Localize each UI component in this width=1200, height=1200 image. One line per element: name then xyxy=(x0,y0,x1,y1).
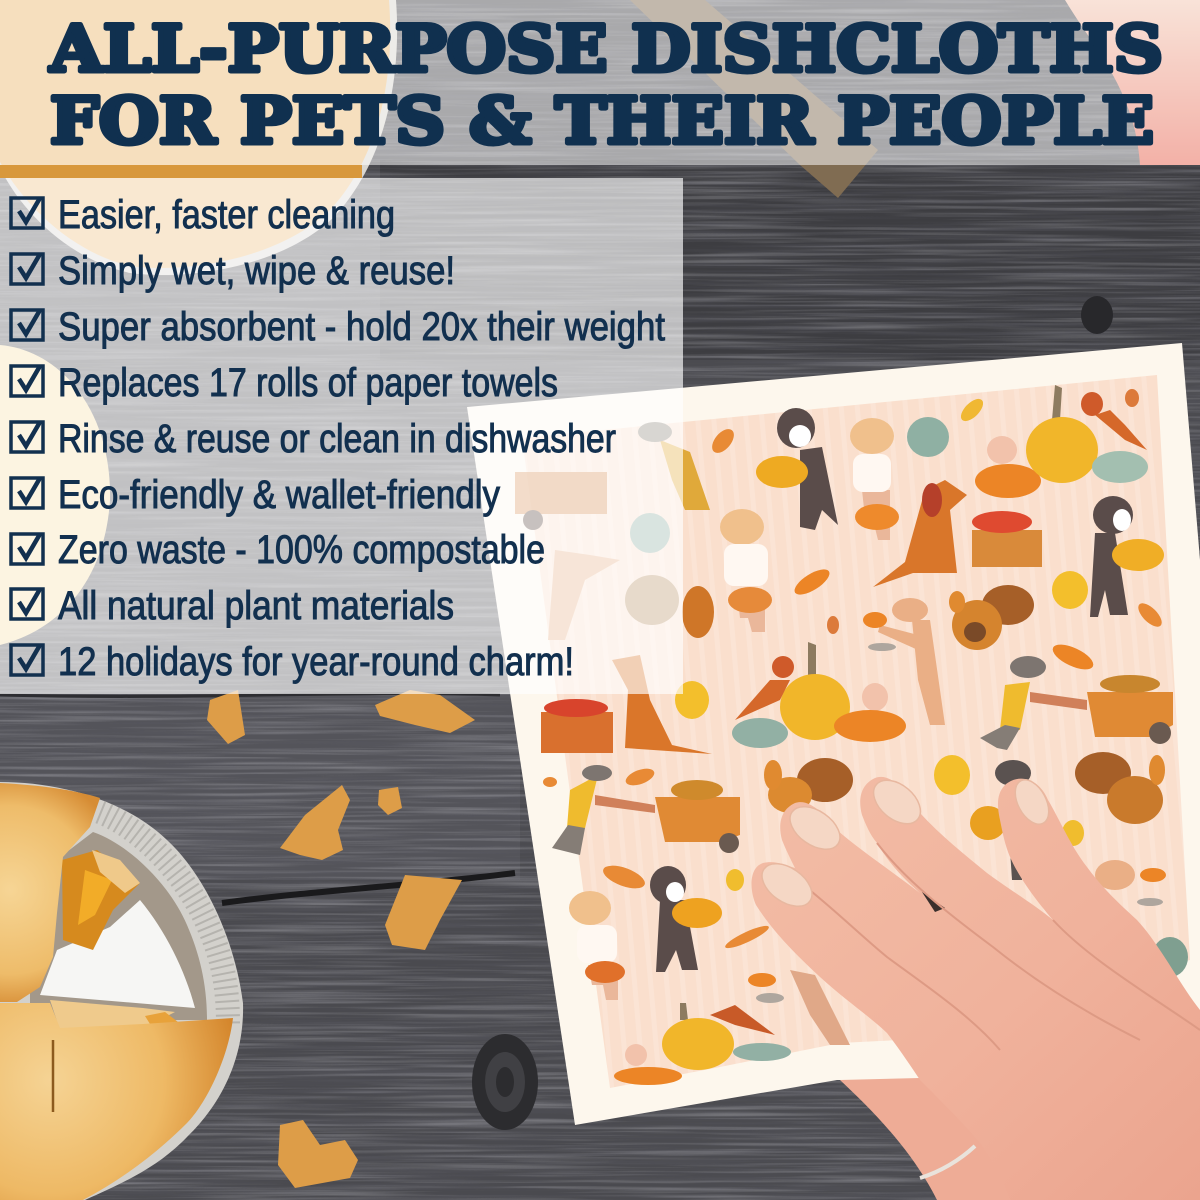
tan dog lower left xyxy=(569,891,625,1000)
benefit 2: Simply wet, wipe & reuse! xyxy=(58,249,455,293)
setter ghost 2 xyxy=(612,655,712,754)
red setter xyxy=(873,480,967,587)
gourd and beagle xyxy=(1081,392,1148,483)
tan standing dog xyxy=(863,598,945,725)
tan dog right xyxy=(1095,860,1166,906)
acorn xyxy=(827,616,839,634)
wood knot upper xyxy=(1081,296,1113,334)
benefit 8: All natural plant materials xyxy=(58,584,454,628)
translucent benefits panel xyxy=(0,178,683,694)
lower palm and thumb side xyxy=(840,1078,1015,1200)
wedding ring xyxy=(920,1146,975,1178)
greyhound with wagon xyxy=(980,656,1173,750)
gap shadow between fingers xyxy=(922,892,945,912)
bottom beagle and gourd xyxy=(710,1005,791,1061)
turkey lower right xyxy=(1075,752,1165,824)
small yellow pumpkin xyxy=(934,755,970,795)
benefit 5: Rinse & reuse or clean in dishwasher xyxy=(58,417,616,461)
wagon ghost xyxy=(515,472,607,530)
apple crate xyxy=(972,511,1042,567)
orange streak xyxy=(723,922,771,952)
benefit 7: Zero waste - 100% compostable xyxy=(58,528,545,572)
wood knot lower xyxy=(472,1034,538,1130)
green gourd xyxy=(907,417,949,457)
black and white dog lower xyxy=(650,866,722,972)
fingernails xyxy=(754,772,1056,915)
large yellow pumpkin xyxy=(1026,385,1098,483)
rabbit on squash xyxy=(975,436,1041,498)
benefit 3: Super absorbent - hold 20x their weight xyxy=(58,305,665,349)
dishcloth xyxy=(467,343,1200,1125)
pie in foil pan bottom left xyxy=(0,782,243,1200)
dog ghost xyxy=(548,550,620,640)
leaf xyxy=(1134,599,1166,631)
title: ALL-PURPOSE DISHCLOTHS xyxy=(49,12,1163,87)
orange leaf xyxy=(543,777,557,787)
fingers and back of hand xyxy=(752,777,1200,1200)
header translucent band xyxy=(0,0,1200,165)
benefit 1: Easier, faster cleaning xyxy=(58,193,395,237)
yellow leaf xyxy=(1062,820,1084,846)
gourd xyxy=(1049,640,1097,674)
black and white dog with pie xyxy=(756,408,838,530)
pie crumbs xyxy=(207,690,475,1188)
yellow leaf xyxy=(726,869,744,891)
bottom rabbit and squash xyxy=(614,1044,682,1085)
finger creases xyxy=(797,843,1200,1050)
beagle and gourd xyxy=(732,656,794,748)
title xyxy=(49,12,1163,159)
yellow leaf xyxy=(957,395,987,425)
greyhound with sweater ghost xyxy=(638,422,710,510)
cloth peach print xyxy=(522,375,1190,1088)
benefit 9: 12 holidays for year-round charm! xyxy=(58,640,574,684)
acorn xyxy=(1125,389,1139,407)
yellow pumpkin xyxy=(1052,571,1088,609)
turkey ghost xyxy=(625,575,714,638)
hand pressing the cloth xyxy=(752,772,1200,1200)
title: FOR PETS & THEIR PEOPLE xyxy=(50,84,1154,159)
small yellow pumpkin xyxy=(675,681,709,719)
benefit 6: Eco-friendly & wallet-friendly xyxy=(58,473,500,517)
green gourd right xyxy=(1152,937,1188,977)
orange leaf xyxy=(708,425,738,457)
cloth white edge xyxy=(467,343,1200,1125)
rabbit on squash xyxy=(834,683,906,742)
center pumpkin xyxy=(780,642,850,740)
apple crate xyxy=(541,699,613,753)
benefit 4: Replaces 17 rolls of paper towels xyxy=(58,361,558,405)
tan dog in skirt xyxy=(850,418,899,540)
orange leaf xyxy=(624,765,656,789)
turkey xyxy=(949,585,1034,650)
wooden rolling pin handle xyxy=(630,0,878,198)
faded tan dog xyxy=(748,970,850,1045)
gourd xyxy=(791,565,833,599)
pale pies top left xyxy=(0,0,397,645)
bottom pumpkin xyxy=(662,1003,734,1070)
black and white dog with pie 2 xyxy=(1090,496,1164,617)
turkey center xyxy=(764,758,853,813)
pale gourd ghost xyxy=(630,513,670,553)
peach corner top right xyxy=(1065,0,1200,165)
tan dog in skirt 2 xyxy=(720,509,772,632)
orange leaf xyxy=(600,861,648,893)
printed pets and harvest motifs xyxy=(515,385,1188,1085)
dog and pie partly hidden xyxy=(970,760,1031,880)
greyhound and wagon left xyxy=(552,765,740,855)
